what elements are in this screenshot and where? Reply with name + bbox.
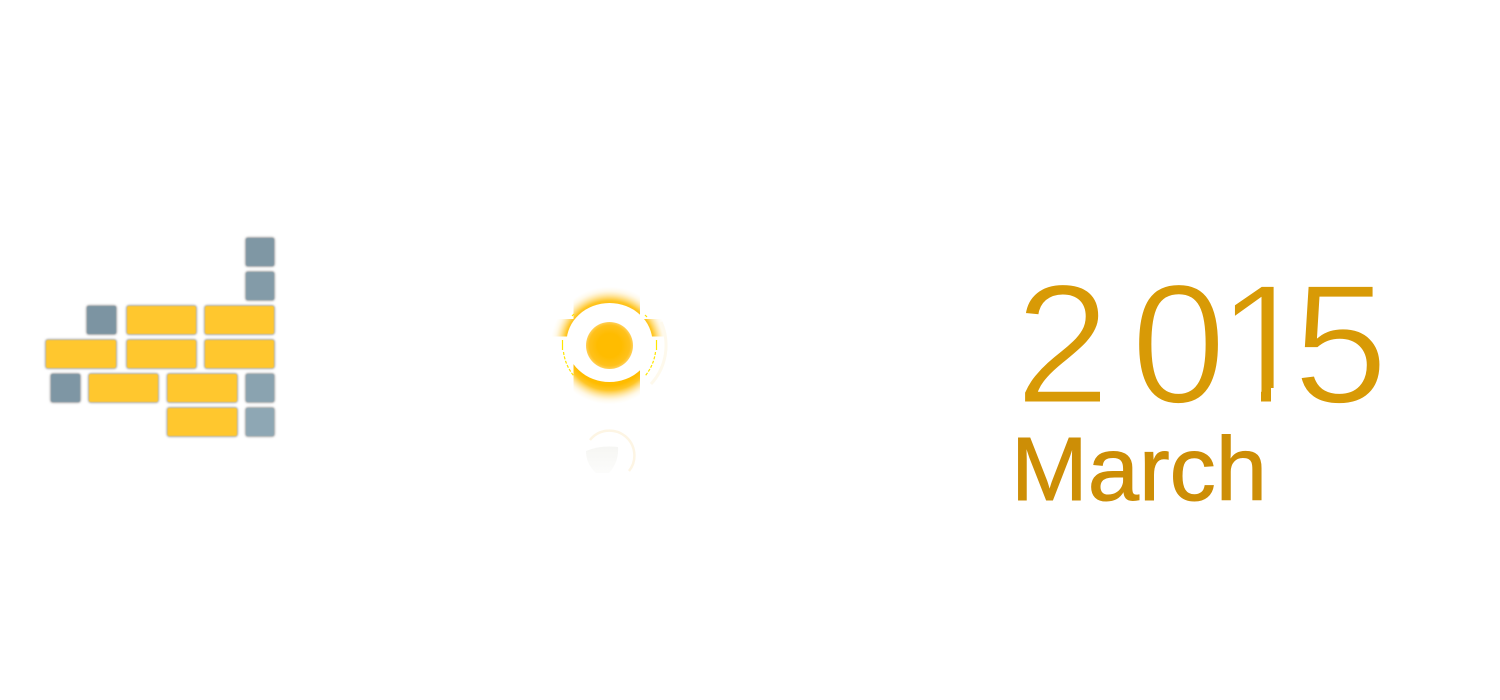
centre disc (586, 322, 633, 369)
target reflection (586, 431, 634, 473)
brick wall icon (45, 237, 275, 437)
reflection blob (586, 446, 618, 473)
infographic canvas (44, 236, 1380, 502)
clipped orange ring (550, 286, 668, 404)
year: 2015 (1015, 249, 1388, 440)
reflection arc (590, 431, 634, 471)
thin dashed yellow arcs (562, 314, 656, 376)
month: March (1011, 420, 1267, 520)
white inner ring (566, 303, 652, 382)
grey bricks (51, 238, 274, 436)
yellow bricks (46, 306, 274, 436)
target icon (550, 286, 668, 404)
brick shadows (45, 237, 275, 437)
faint outer arc on the right (651, 322, 666, 384)
